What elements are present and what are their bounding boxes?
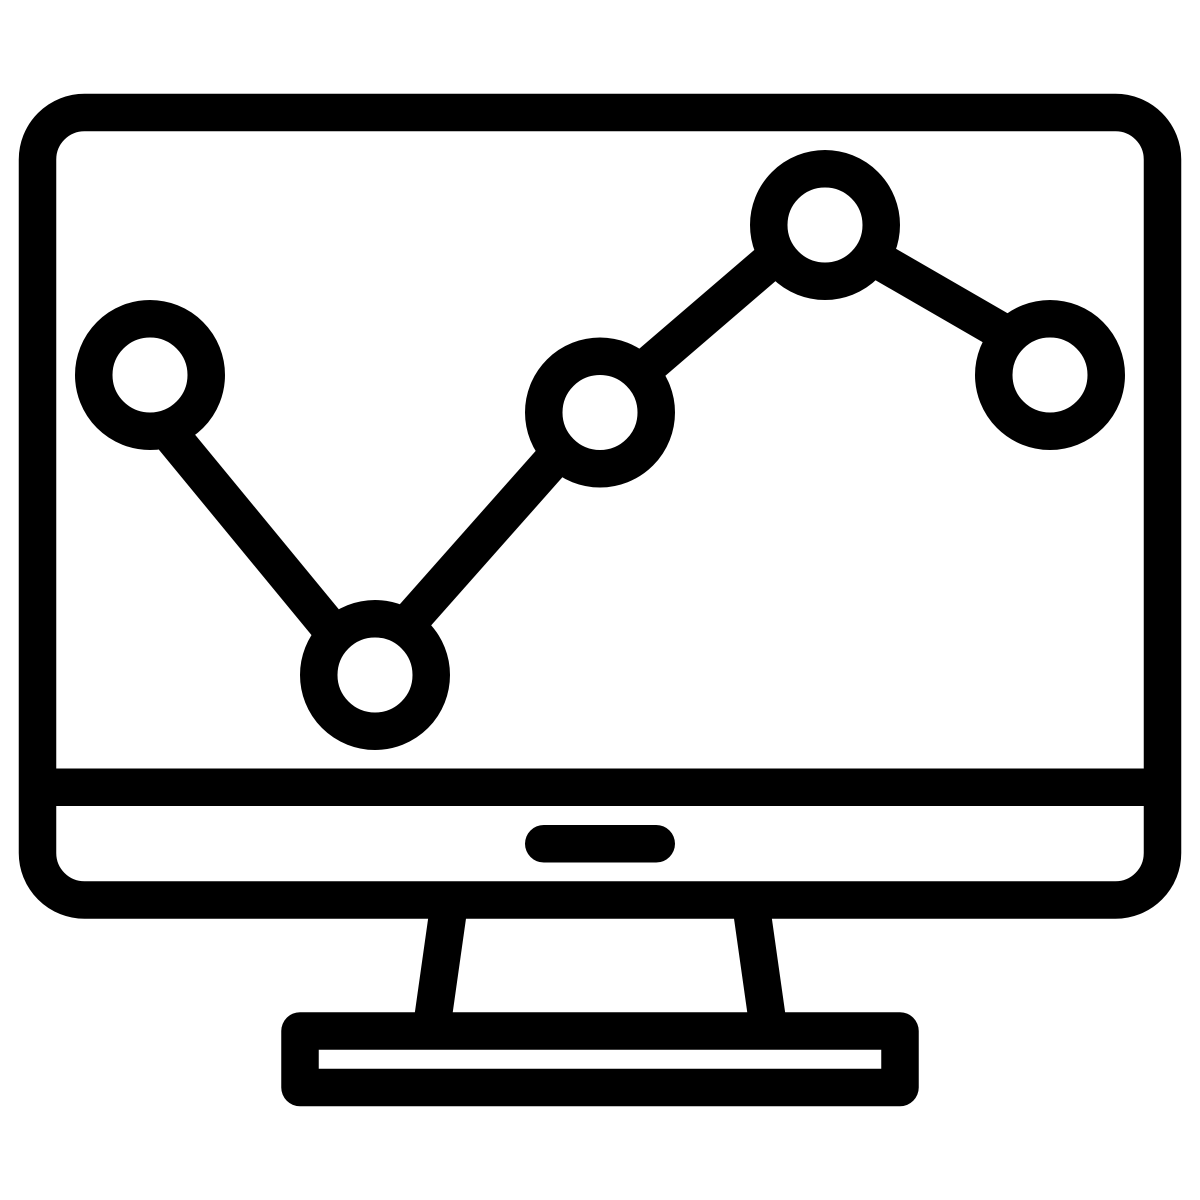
monitor base [300, 1031, 900, 1088]
monitor frame [38, 112, 1162, 900]
monitor stand neck [433, 912, 767, 1018]
monitor button [525, 825, 675, 862]
screen divider [37, 768, 1163, 806]
chart line segments [162, 256, 1006, 639]
data points [94, 169, 1106, 731]
line chart [94, 169, 1106, 731]
